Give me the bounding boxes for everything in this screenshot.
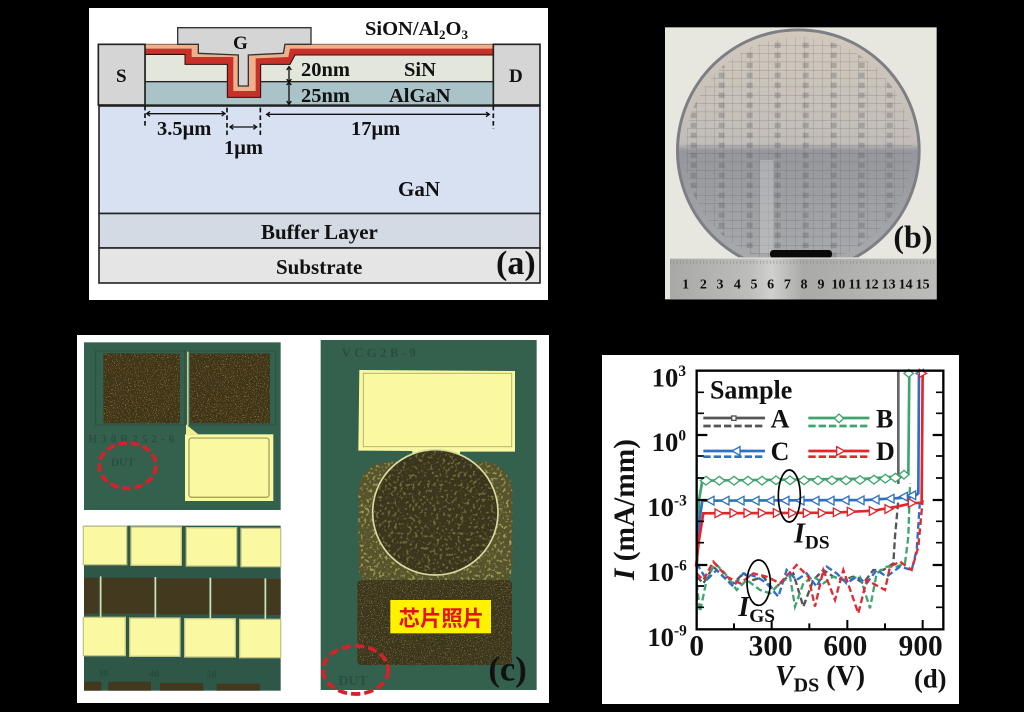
legend: Sample bbox=[710, 376, 792, 405]
micrograph: right bbox=[321, 340, 537, 694]
ruler: 5 bbox=[750, 277, 757, 292]
ruler: 11 bbox=[848, 277, 862, 292]
y axis title: I (mA/mm) bbox=[609, 439, 641, 581]
x axis title: V bbox=[775, 661, 796, 692]
ruler: 7 bbox=[784, 277, 791, 292]
label: AlGaN: AlGaN bbox=[389, 85, 451, 107]
ruler: 8 bbox=[800, 277, 807, 292]
ruler: 1 bbox=[682, 277, 689, 292]
y axis tick labels: -9 bbox=[674, 622, 687, 639]
ruler: 13 bbox=[882, 277, 896, 292]
legend: A bbox=[771, 404, 790, 433]
micrograph: right: VCG2B-9 bbox=[342, 346, 416, 360]
y axis tick labels: 10 bbox=[647, 492, 674, 522]
panel tag (c): (c) bbox=[488, 650, 527, 688]
callout: IDS: DS bbox=[805, 533, 830, 554]
label: Buffer Layer: Buffer Layer bbox=[261, 220, 378, 244]
label: GaN: GaN bbox=[398, 177, 440, 201]
x axis tick labels bbox=[689, 631, 943, 663]
panel tag (d): (d) bbox=[914, 663, 947, 693]
callout: IDS: I bbox=[794, 519, 805, 550]
ruler bbox=[670, 259, 937, 299]
y axis tick labels: 10 bbox=[652, 427, 678, 457]
drain current curve: sample A bbox=[894, 371, 902, 484]
label: 25nm: 25nm bbox=[301, 85, 350, 107]
x axis tick labels: 900 bbox=[899, 631, 943, 663]
label: SiON/Al2O3: O bbox=[446, 18, 462, 40]
gate leakage curves (dashed) bbox=[697, 483, 923, 613]
drain current curve: sample C bbox=[697, 369, 923, 567]
plot frame and ticks bbox=[697, 371, 943, 629]
highlighted chip label bbox=[390, 600, 491, 633]
callout: IDS bbox=[778, 470, 830, 554]
label: 17um: 17μm bbox=[351, 118, 400, 140]
y axis tick labels: 10 bbox=[647, 622, 674, 652]
ruler: 3 bbox=[716, 277, 723, 292]
GaN layer bbox=[99, 106, 540, 214]
x axis tick labels: 300 bbox=[749, 631, 793, 663]
micrograph: top left: H30R252-6 bbox=[88, 434, 175, 446]
callout: IGS bbox=[737, 560, 775, 627]
label: D: D bbox=[509, 66, 523, 87]
ruler: 14 bbox=[899, 277, 913, 292]
ruler: 4 bbox=[734, 277, 741, 292]
label: 3.5um: 3.5μm bbox=[157, 118, 211, 140]
legend: B bbox=[876, 404, 893, 433]
label: SiON/Al2O3: 2 bbox=[439, 27, 446, 42]
label: S: S bbox=[116, 66, 127, 87]
micrograph: top left bbox=[84, 342, 281, 510]
ruler: 2 bbox=[700, 277, 707, 292]
panel tag (a): (a) bbox=[496, 245, 536, 282]
micrograph: bottom left: 50 bbox=[207, 670, 217, 681]
micrograph: right: DUT bbox=[338, 674, 369, 689]
callout: IGS: I bbox=[738, 592, 749, 623]
label: 1um: 1μm bbox=[224, 137, 263, 159]
label: Substrate: Substrate bbox=[276, 255, 362, 279]
ruler: 6 bbox=[767, 277, 774, 292]
x axis tick labels: 0 bbox=[689, 631, 704, 663]
micrograph: bottom left: 30 bbox=[98, 668, 108, 679]
panel c: chip photos bbox=[77, 335, 549, 703]
legend bbox=[703, 376, 895, 466]
ruler: 12 bbox=[865, 277, 879, 292]
buffer layer bbox=[99, 214, 540, 248]
panel a: device cross-section bbox=[89, 8, 548, 300]
highlighted chip label: 芯片照片 bbox=[399, 607, 484, 631]
legend: C bbox=[771, 437, 789, 466]
y axis tick labels: -3 bbox=[674, 492, 687, 509]
micrograph: bottom left: 40 bbox=[149, 669, 159, 680]
callout: IGS: GS bbox=[749, 606, 775, 627]
drain current curve: sample B bbox=[697, 369, 913, 567]
y axis tick labels: 3 bbox=[678, 363, 686, 380]
panel tag (b): (b) bbox=[893, 218, 932, 254]
micrograph: top left: DUT bbox=[111, 457, 135, 469]
micrograph: bottom left bbox=[83, 526, 281, 691]
ruler: 15 bbox=[916, 277, 930, 292]
ruler: 10 bbox=[831, 277, 845, 292]
label: G: G bbox=[233, 33, 248, 54]
panel b: wafer photo bbox=[665, 27, 937, 299]
wafer disc bbox=[676, 28, 921, 273]
y axis tick labels bbox=[647, 363, 687, 652]
y axis tick labels: -6 bbox=[674, 557, 687, 574]
x axis title: DS bbox=[794, 675, 819, 697]
ruler: 9 bbox=[817, 277, 824, 292]
gate stack detail bbox=[98, 28, 540, 135]
y axis tick labels: 10 bbox=[652, 363, 678, 393]
drain current curve: sample D bbox=[696, 369, 927, 567]
y axis tick labels: 10 bbox=[647, 557, 674, 587]
legend: D bbox=[876, 437, 895, 466]
panel d: I-V chart bbox=[602, 355, 959, 704]
x axis tick labels: 600 bbox=[823, 631, 867, 663]
substrate layer bbox=[99, 248, 540, 283]
label: SiN: SiN bbox=[404, 59, 436, 81]
label: 20nm: 20nm bbox=[301, 59, 350, 81]
label: SiON/Al2O3: 3 bbox=[462, 27, 468, 42]
x axis title: (V) bbox=[819, 661, 865, 692]
label: SiON/Al2O3: SiON/Al bbox=[365, 18, 439, 40]
y axis tick labels: 0 bbox=[678, 427, 686, 444]
